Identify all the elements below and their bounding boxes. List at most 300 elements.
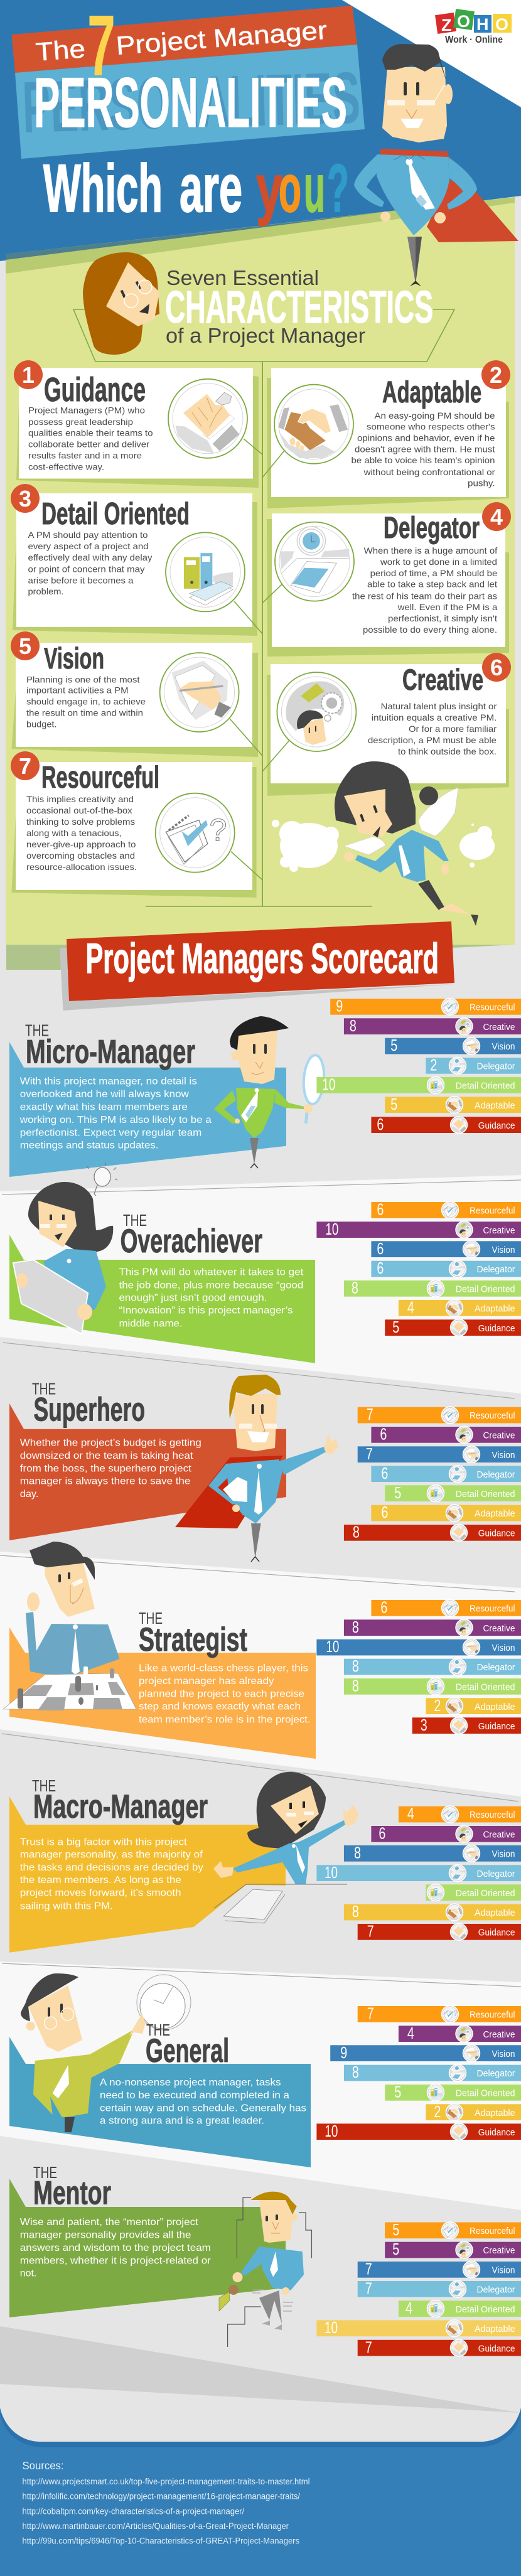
bar: Detail Oriented [316, 1075, 521, 1094]
section backgrounds [0, 1175, 521, 2413]
bar: Vision: 8 [354, 1843, 361, 1862]
number badges: 7 [19, 753, 31, 779]
bar: Resourceful: Resourceful [470, 2010, 515, 2020]
bar: Adaptable: Adaptable [475, 1101, 515, 1111]
bar: Vision [385, 1036, 521, 1055]
bar: Vision [358, 1444, 521, 1463]
heading: The Overachiever [121, 1211, 262, 1260]
title: Which are you?: are [180, 150, 242, 226]
number badges: 2 [490, 362, 502, 388]
bar: Vision: Vision [492, 1451, 515, 1461]
chart: General scores [316, 2004, 521, 2140]
bar: Adaptable: Adaptable [475, 1304, 515, 1314]
sources list: http://99u.com/tips/6946/Top-10-Characteristics-of-GREAT-Project-Managers [23, 2536, 299, 2546]
text: Detail Oriented: effectively deal with any delay [28, 552, 153, 562]
text: Creative: Natural talent plus insight or [381, 701, 497, 711]
bar: Adaptable: Adaptable [475, 2108, 515, 2118]
text: Strategist: step and knows exactly what each [139, 1702, 301, 1712]
bar: Guidance: 5 [392, 1318, 399, 1336]
bar: Resourceful: 7 [367, 2004, 374, 2022]
bar: Delegator [371, 1464, 521, 1483]
section: The Macro-Manager [9, 1772, 521, 1953]
bar: Delegator: Delegator [477, 1265, 515, 1275]
bar: Delegator: 6 [381, 1464, 388, 1483]
character: strategist at chessboard [3, 1542, 136, 1710]
text: Overachiever [119, 1267, 304, 1329]
bar: Delegator: 10 [325, 1863, 338, 1882]
bar: Adaptable: 4 [407, 1298, 414, 1317]
bar: Vision: Vision [492, 2266, 515, 2276]
text: Adaptable: be able to voice his team's opinion [352, 455, 495, 465]
chart: Overachiever scores [316, 1200, 521, 1336]
bar: Detail Oriented: Detail Oriented [456, 2089, 515, 2099]
bar: Detail Oriented [426, 1884, 521, 1901]
panel: General [9, 2037, 311, 2167]
text: Overachiever: middle name. [119, 1318, 182, 1329]
text: Macro-Manager: Trust is a big factor with this project [20, 1837, 187, 1847]
bar: Creative: 10 [325, 1220, 338, 1238]
text: General: certain way and on schedule. Generally has [100, 2103, 306, 2113]
bar: Creative: Creative [483, 1022, 515, 1033]
panel: Superhero [9, 1403, 286, 1540]
heading: Resourceful: Resourceful [41, 761, 159, 795]
text: Guidance: cost-effective way. [28, 462, 104, 472]
bar: Vision: 10 [326, 1637, 339, 1656]
icon: writing hand [160, 653, 239, 732]
text: Macro-Manager: manager personality, as the majority of [20, 1850, 203, 1860]
panel: Macro-Manager [9, 1796, 286, 1953]
bar: Guidance: Guidance [478, 2344, 515, 2354]
text: Delegator: well. Even if the PM is a [397, 602, 498, 612]
scorecard banner [60, 921, 454, 1011]
text: Resourceful: thinking to solve problems [26, 817, 135, 827]
connector lines [230, 362, 289, 906]
number badges: 6 [490, 655, 503, 680]
bar: Guidance: 10 [325, 2122, 338, 2140]
bar: Creative: 5 [392, 2240, 399, 2258]
title: Which are you? [43, 150, 349, 226]
bar: Detail Oriented: Detail Oriented [456, 2305, 515, 2315]
chart: Strategist scores [316, 1598, 521, 1734]
heading: Guidance: Guidance [44, 371, 146, 409]
bar: Adaptable: 8 [352, 1902, 359, 1921]
chart: Mentor scores [316, 2220, 521, 2357]
text: Vision: the result on time and within [26, 708, 143, 718]
bar: Detail Oriented: 10 [322, 1075, 335, 1093]
text: Delegator: period of time, a PM should be [370, 568, 498, 578]
text: Macro-Manager: the team members. As long as the [20, 1875, 181, 1886]
bar: Guidance: 8 [353, 1523, 360, 1542]
heading: The Strategist: Strategist [139, 1621, 247, 1658]
text: Strategist [139, 1663, 311, 1725]
bar: Detail Oriented [399, 2299, 521, 2317]
logo: ZOHO Work Online: Z [441, 16, 452, 35]
text: Strategist: project manager has already [139, 1676, 274, 1687]
heading: The Mentor [33, 2163, 111, 2211]
bar: Delegator: 6 [377, 1258, 384, 1277]
text: Vision [26, 674, 146, 729]
bar: Guidance: 7 [367, 1922, 374, 1941]
bar: Creative: Creative [483, 1431, 515, 1441]
text: Guidance: collaborate better and deliver [28, 439, 149, 449]
bar: Delegator [358, 2278, 521, 2298]
bar: Delegator: 8 [352, 2063, 359, 2081]
bar: Delegator: 8 [352, 1656, 359, 1675]
bar: Resourceful: 9 [336, 997, 343, 1016]
heading: Seven Essential Characteristics of a Project Manager: of a Project Manager [166, 324, 365, 347]
bar: Resourceful: Resourceful [470, 2226, 515, 2236]
text: Micro-Manager: exactly what his team members are [20, 1102, 188, 1112]
bar: Vision: Vision [492, 1643, 515, 1653]
bar: Guidance [358, 2337, 521, 2357]
footer [0, 2408, 521, 2576]
text: Micro-Manager: working on. This PM is also likely to be a [19, 1115, 212, 1125]
bar: Guidance [412, 1715, 521, 1734]
bar: Guidance [316, 2122, 521, 2140]
bar: Guidance: Guidance [478, 1722, 515, 1732]
bar: Vision: 9 [340, 2043, 347, 2062]
bar: Detail Oriented: Detail Oriented [456, 1889, 515, 1899]
section: The Strategist [3, 1542, 521, 1759]
bar: Guidance: Guidance [478, 1121, 515, 1131]
bar: Delegator: Delegator [477, 1062, 515, 1072]
bar: Adaptable: Adaptable [475, 2324, 515, 2334]
sources list: http://www.martinbauer.com/Articles/Qualities-of-a-Great-Project-Manager [23, 2521, 289, 2531]
text: Mentor: answers and wisdom to the project team [20, 2243, 211, 2253]
bar: Adaptable: 2 [434, 1696, 441, 1715]
heading: The Micro-Manager [25, 1021, 195, 1070]
bar: Vision [371, 1239, 521, 1258]
bar: Detail Oriented: Detail Oriented [456, 1489, 515, 1500]
bar: Delegator: Delegator [477, 1869, 515, 1879]
bar: Guidance [385, 1318, 521, 1336]
bar: Detail Oriented: 4 [406, 2299, 412, 2317]
text: Macro-Manager: project moves forward, it’s smooth [20, 1888, 181, 1899]
bar: Vision: 6 [377, 1239, 384, 1258]
text: Delegator: possible to do every thing alone. [363, 625, 497, 635]
logo: ZOHO Work Online: O [457, 12, 470, 31]
bar: Detail Oriented: 8 [352, 1676, 359, 1695]
character: superhero with papers [175, 1375, 338, 1562]
text: Delegator: the rest of his team do their part as [352, 591, 497, 601]
bar: Adaptable: 2 [434, 2102, 441, 2121]
heading: Vision: Vision [44, 641, 104, 675]
section: The Mentor [9, 2163, 521, 2357]
character: hero with cape [354, 44, 518, 286]
text: Overachiever: enough” just isn’t good enough. [119, 1292, 267, 1303]
text: Adaptable: doesn't agree with them. He must [355, 444, 495, 454]
bar: Resourceful [371, 1598, 521, 1617]
text: Overachiever: “Innovation” is this project manager’s [119, 1306, 293, 1316]
sources list [23, 2477, 310, 2546]
panel: Guidance [16, 368, 259, 488]
bar: Vision: Vision [492, 1042, 515, 1052]
text: General: a strong aura and is a great leader. [100, 2116, 264, 2127]
bar: Adaptable [385, 1095, 521, 1114]
text: Macro-Manager [20, 1837, 203, 1911]
text: Resourceful [26, 794, 137, 872]
bar: Creative: 6 [380, 1425, 387, 1444]
clouds [272, 820, 495, 872]
bar: Detail Oriented [344, 1676, 521, 1695]
heading: The Overachiever: Overachiever [121, 1223, 262, 1260]
bar: Delegator: Delegator [477, 1470, 515, 1480]
section: The Overachiever [9, 1162, 521, 1363]
text: Micro-Manager: meetings and status updates. [20, 1140, 158, 1151]
bar: Resourceful [358, 1405, 521, 1424]
logo: ZOHO Work Online [435, 9, 512, 45]
heading: The Micro-Manager: Micro-Manager [26, 1033, 195, 1070]
icon: handshake [274, 385, 353, 464]
sources list: http://cobaltpm.com/key-characteristics-of-a-project-manager/ [23, 2506, 244, 2516]
panel: Strategist [9, 1628, 316, 1759]
text: Superhero [20, 1437, 201, 1500]
character: overachiever with book and lightbulb [13, 1162, 117, 1334]
bar: Creative: Creative [483, 1830, 515, 1840]
bar: Resourceful: 4 [407, 1804, 414, 1823]
characteristics heading frame [73, 309, 454, 906]
panel: Overachiever [9, 1235, 315, 1363]
bar: Adaptable [399, 1298, 521, 1317]
icon: binders [166, 532, 245, 611]
text: Strategist: team member’s role is in the project. [139, 1714, 311, 1725]
sources list: http://infolific.com/technology/project-management/16-project-manager-traits/ [23, 2492, 300, 2501]
text: Detail Oriented [28, 530, 153, 596]
text: Creative: Or for a more familiar [409, 724, 497, 734]
text: Guidance: qualities enable their teams to [28, 428, 153, 438]
bar: Detail Oriented: Detail Oriented [456, 1284, 515, 1294]
heading: The Strategist [139, 1609, 247, 1658]
text: Overachiever: the job done, plus more because “good [119, 1280, 303, 1291]
bar: Resourceful: 6 [380, 1598, 387, 1617]
text: Adaptable: without being confrontational or [363, 467, 495, 477]
section: The General [9, 1973, 521, 2167]
text: Resourceful: overcoming obstacles and [26, 851, 135, 861]
number badges: 1 [22, 362, 35, 388]
title: Project Manager: Project Manager [115, 16, 328, 60]
title: Which are you?: y [256, 150, 282, 226]
bar: Resourceful [371, 1200, 521, 1219]
bar: Detail Oriented: 5 [394, 1483, 401, 1502]
icon: clock and tablet [275, 522, 354, 601]
heading: The Micro-Manager: THE [25, 1021, 49, 1040]
bar: Vision: Vision [492, 1849, 515, 1859]
title: Which are you?: Which [43, 150, 163, 226]
text: Creative [368, 701, 497, 756]
heading: The Superhero: THE [32, 1380, 56, 1398]
bar: Adaptable: 6 [381, 1503, 388, 1521]
bar: Delegator [316, 1863, 521, 1882]
bar: Creative [399, 2024, 521, 2042]
bar: Guidance [344, 1523, 521, 1542]
text: Mentor: Wise and patient, the “mentor” project [20, 2217, 198, 2228]
bar: Vision [316, 1637, 521, 1656]
bar: Adaptable: Adaptable [475, 1509, 515, 1519]
title band: The Project Manager [11, 6, 357, 73]
text: Resourceful: never-give-up approach to [26, 839, 136, 849]
text: Vision: budget. [26, 719, 56, 729]
text: Detail Oriented: A PM should pay attention to [28, 530, 148, 540]
character: micro-manager with magnifier [214, 1016, 326, 1168]
bar: Adaptable [316, 2318, 521, 2337]
bar: Detail Oriented: Detail Oriented [456, 1081, 515, 1091]
bar: Creative [344, 1618, 521, 1636]
bar: Creative: 6 [379, 1824, 385, 1843]
bar: Adaptable: Adaptable [475, 1702, 515, 1712]
heading: The General: THE [146, 2021, 170, 2039]
heading: Creative: Creative [402, 663, 483, 696]
character: mentor on stairs [219, 2192, 311, 2347]
bar: Guidance: Guidance [478, 1928, 515, 1938]
bar: Creative: 8 [352, 1618, 359, 1636]
character: general holding clock [21, 1973, 146, 2132]
bar: Adaptable [426, 1696, 521, 1715]
bar: Resourceful [385, 2220, 521, 2240]
title: Which are you?: u [304, 150, 325, 226]
bar: Resourceful [358, 2004, 521, 2023]
bar: Detail Oriented: 8 [352, 1278, 358, 1297]
number badges [11, 360, 511, 780]
text: Macro-Manager: the tasks and decisions are decided by [20, 1862, 203, 1873]
title block [11, 0, 365, 226]
text: Superhero: downsized or the team is taking heat [20, 1451, 193, 1461]
bar: Delegator [371, 1258, 521, 1278]
heading: The Superhero: Superhero [34, 1391, 145, 1428]
bar: Creative: 8 [350, 1016, 357, 1035]
bar: Vision: 7 [366, 1444, 373, 1463]
text: Creative: intuition equals a creative PM. [372, 712, 497, 722]
heading: The Macro-Manager: THE [32, 1776, 56, 1795]
heading: The Overachiever: THE [123, 1211, 147, 1230]
bar: Creative [385, 2240, 521, 2259]
bar: Vision [358, 2260, 521, 2278]
text: Creative: to think outside the box. [398, 746, 497, 756]
bar: Vision: 7 [365, 2260, 372, 2278]
bar: Detail Oriented: Detail Oriented [456, 1682, 515, 1692]
panel: Detail Oriented [13, 493, 257, 636]
panel: Adaptable [267, 368, 509, 508]
bar: Delegator [344, 1656, 521, 1676]
bar: Creative: Creative [483, 1624, 515, 1634]
text: Superhero: manager is always there to save the [20, 1476, 190, 1487]
heading: Seven Essential Characteristics of a Project Manager [165, 266, 433, 347]
text: Superhero: from the boss, the superhero project [20, 1463, 191, 1474]
panel: Mentor [9, 2179, 286, 2317]
bar: Adaptable [344, 1902, 521, 1921]
text: General [100, 2078, 306, 2127]
heading: The General: General [146, 2032, 229, 2069]
bar: Creative: 4 [407, 2024, 414, 2042]
panel: Vision [11, 641, 258, 757]
bar: Vision: Vision [492, 1245, 515, 1255]
bar: Creative: Creative [483, 2246, 515, 2256]
text: Vision: should engage in, to achieve [26, 697, 146, 707]
icon: thinking head [277, 672, 356, 751]
bar: Resourceful: 7 [367, 1405, 373, 1424]
sources list: http://www.projectsmart.co.uk/top-five-project-management-traits-to-master.html [23, 2477, 310, 2486]
icon: checklist [156, 793, 235, 872]
text: Mentor: members, whether it is project-related or [20, 2256, 212, 2267]
bar: Resourceful: Resourceful [470, 1411, 515, 1421]
bar: Resourceful: Resourceful [470, 1810, 515, 1820]
bar: Resourceful: 6 [377, 1200, 384, 1219]
text: Detail Oriented: arise before it becomes a [28, 575, 134, 585]
title: Which are you?: o [279, 150, 301, 226]
text: Overachiever: This PM will do whatever it takes to get [119, 1267, 304, 1278]
text: Resourceful: resource-allocation issues. [26, 862, 137, 872]
text: Guidance: results faster and in a more [28, 450, 142, 460]
text: Adaptable: An easy-going PM should be [374, 411, 495, 421]
bar: Detail Oriented [385, 1483, 521, 1502]
text: Detail Oriented: or point of concern that may [28, 564, 145, 574]
heading: The Macro-Manager: Macro-Manager [33, 1788, 208, 1825]
heading: The Macro-Manager [32, 1776, 208, 1825]
text: Macro-Manager: sailing with this PM. [20, 1901, 113, 1911]
bar: Guidance: Guidance [478, 2128, 515, 2138]
bar: Vision [344, 1843, 521, 1862]
icon: fist [168, 379, 247, 458]
bar: Resourceful: Resourceful [470, 1604, 515, 1614]
text: Micro-Manager: overlooked and he will always know [20, 1089, 189, 1100]
character: flying woman with wings [335, 761, 478, 926]
text: Adaptable: someone who respects other's [367, 422, 495, 432]
heading: The Mentor: Mentor [33, 2174, 111, 2211]
bar: Adaptable [371, 1503, 521, 1522]
bar: Delegator: 2 [430, 1056, 437, 1075]
text: Resourceful: occasional out-of-the-box [26, 805, 132, 815]
heading: Delegator: Delegator [384, 512, 480, 545]
text: Strategist: Like a world-class chess player, this [139, 1663, 308, 1674]
text: Delegator: perfectionist, it simply isn't [388, 613, 497, 623]
bar: Delegator: Delegator [477, 2285, 515, 2295]
character: macro-manager at desk [213, 1772, 359, 1923]
text: Delegator: When there is a huge amount of [364, 545, 497, 555]
text: Detail Oriented: problem. [28, 586, 64, 596]
section: The Superhero [9, 1375, 521, 1562]
bar: Vision [330, 2043, 521, 2062]
bar: Guidance: Guidance [478, 1529, 515, 1539]
bar: Delegator: 7 [365, 2278, 372, 2297]
text: Strategist: planned the project to each precise [139, 1688, 304, 1699]
bar: Guidance [371, 1115, 521, 1134]
bar: Guidance: 3 [421, 1715, 427, 1734]
text: Superhero: Whether the project’s budget is getting [20, 1437, 201, 1448]
logo: ZOHO Work Online: Work · Online [445, 35, 503, 45]
bar: Guidance: 6 [377, 1115, 384, 1134]
bar: Delegator [426, 1056, 521, 1075]
bar: Adaptable: 5 [390, 1095, 397, 1114]
text: Micro-Manager [19, 1076, 212, 1151]
text: Mentor [20, 2217, 212, 2279]
bar: Adaptable: Adaptable [475, 1908, 515, 1918]
heading: The Superhero [32, 1380, 145, 1428]
number seven: 7 [87, 0, 115, 94]
text: Delegator: able to take a step back and let [367, 579, 497, 589]
text: Vision: important activities a PM [26, 685, 128, 695]
title: The: The [35, 34, 86, 67]
sources heading: Sources: [23, 2459, 64, 2472]
bar: Guidance: 7 [365, 2337, 372, 2356]
logo: ZOHO Work Online: O [495, 15, 508, 34]
icon: clock [137, 1975, 191, 2030]
chart: Macro-Manager scores [316, 1804, 521, 1941]
title panel [15, 45, 365, 159]
bar: Adaptable: 10 [325, 2318, 338, 2337]
text: Vision: Planning is one of the most [26, 674, 140, 684]
bar: Resourceful: 5 [392, 2220, 399, 2239]
bar: Creative [316, 1220, 521, 1238]
bar: Guidance [358, 1922, 521, 1941]
